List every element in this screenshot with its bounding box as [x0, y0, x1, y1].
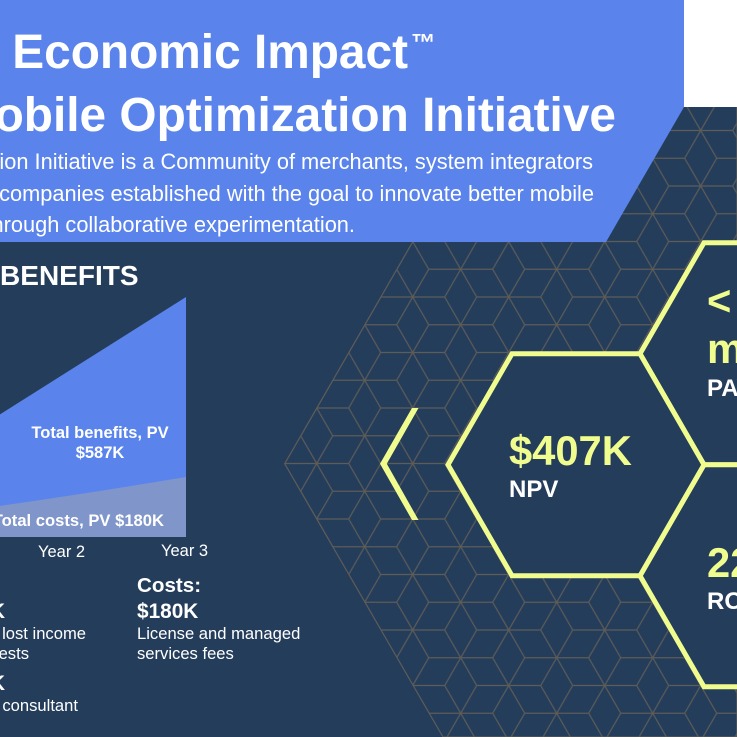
hexagon: npv: $407K	[509, 427, 632, 474]
costs column: Costs:	[137, 574, 201, 597]
benefits column	[0, 600, 86, 715]
axis labels: Year 2	[38, 543, 85, 561]
costs column	[137, 574, 300, 663]
area chart	[0, 297, 208, 561]
benefits label	[31, 424, 169, 462]
title	[0, 26, 616, 142]
costs column: $180K	[137, 600, 198, 623]
hexagon: roi	[640, 465, 737, 687]
hexagon: npv	[448, 354, 704, 576]
benefits area	[0, 297, 186, 537]
lattice pattern	[285, 94, 737, 737]
axis labels: Year 3	[161, 542, 208, 560]
costs column: services fees	[137, 644, 234, 663]
header banner	[0, 0, 684, 242]
costs area	[0, 477, 186, 537]
benefits label: Total benefits, PV	[31, 424, 169, 442]
intro text	[0, 149, 594, 237]
white corner block	[684, 0, 737, 107]
axis labels	[38, 542, 208, 561]
costs column: License and managed	[137, 624, 300, 643]
hexagon: npv: NPV	[509, 476, 558, 503]
chevron arrow	[380, 408, 418, 520]
title: ™	[411, 30, 436, 57]
hexagon: payback	[640, 243, 737, 465]
benefits label: $587K	[76, 444, 124, 462]
